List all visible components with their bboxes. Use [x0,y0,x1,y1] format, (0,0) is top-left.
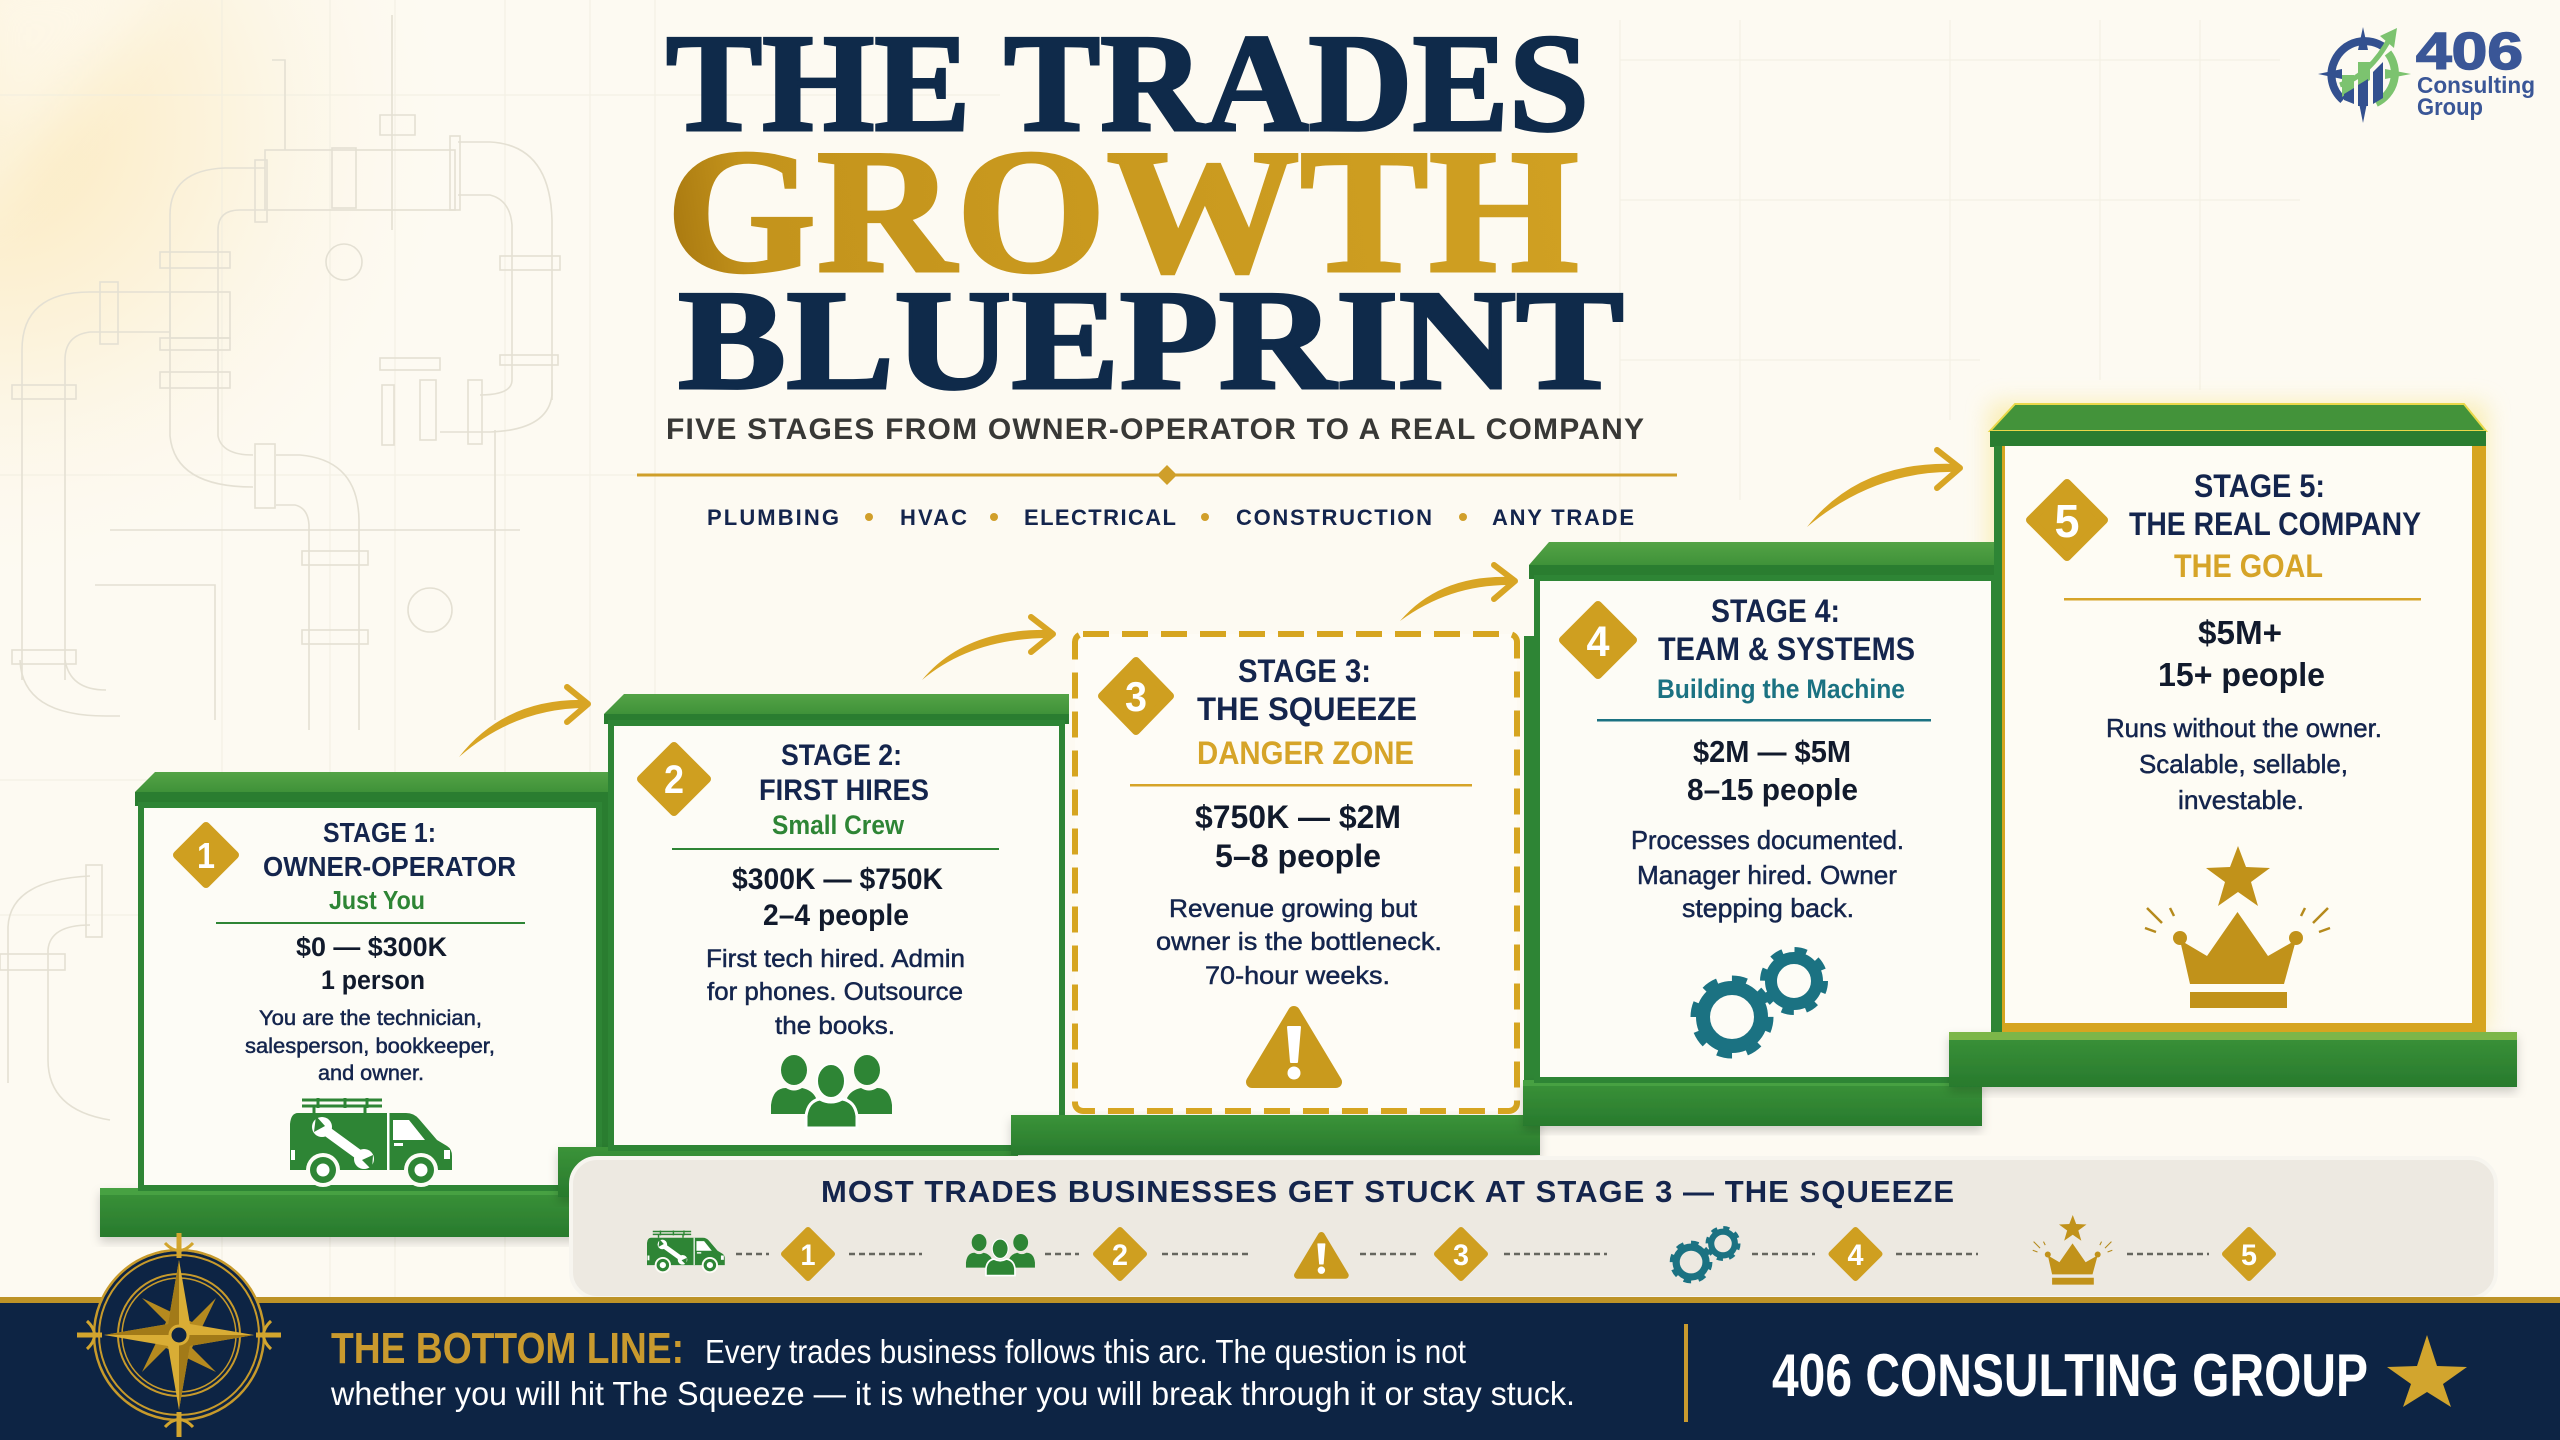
trades list: ELECTRICAL [1024,505,1176,530]
stage 2 card [611,723,1062,1148]
stage 5 revenue and people: 15+ people [2158,656,2325,693]
stage 4 heading [1657,593,1915,704]
logo: 406 Consulting Group: Consulting [2417,72,2535,98]
mini gears [1672,1228,1739,1281]
stage 2 heading: Small Crew [772,810,905,840]
stage 4 badge [1563,605,1633,675]
logo: 406 Consulting Group: Group [2417,94,2483,121]
stage 1 heading: Just You [329,885,425,915]
stage 5 badge [2030,483,2104,557]
stage 3 description: 70-hour weeks. [1205,962,1390,990]
stage 1 heading [263,817,516,915]
mini van [647,1231,725,1273]
trades list: HVAC [900,505,967,530]
stage 5 description: Runs without the owner. [2106,713,2382,743]
arrow: stage 4 to stage 5 [1807,450,1960,527]
stage 2 description: First tech hired. Admin [706,945,965,973]
stage 1 description: You are the technician, [259,1007,482,1030]
stage 2 roof [604,694,1069,724]
stage 5 revenue and people [2158,614,2325,693]
mini warning [1297,1235,1345,1275]
trades list: CONSTRUCTION [1236,505,1432,530]
stage 5 base [1949,1032,2517,1087]
stage 5 roof [1990,404,2486,447]
mini badge 4: 4 [1848,1239,1864,1272]
stage 1 revenue and people [296,932,447,995]
stage 4 description: Processes documented. [1631,825,1904,855]
bottom bar [0,1233,2560,1440]
stage 3 heading [1197,653,1417,771]
stage 2 revenue and people [732,863,943,932]
stage 4 card [1537,578,1994,1080]
stage 1 description: and owner. [318,1062,424,1085]
stage 2 heading: FIRST HIRES [759,774,929,807]
stage 1 base [100,1188,580,1237]
stage 3 revenue and people [1195,799,1401,874]
stage 5 heading: THE REAL COMPANY [2129,506,2421,542]
stage 4 revenue and people: $2M — $5M [1693,734,1851,769]
mini badge 4 [1832,1230,1880,1278]
stage 3 description: owner is the bottleneck. [1156,928,1442,956]
stage 4 description: Manager hired. Owner [1637,860,1897,890]
stage 5 description [2106,713,2382,815]
trades list [707,505,1634,530]
subtitle: FIVE STAGES FROM OWNER-OPERATOR TO A REAL COMPANY [666,413,1644,446]
logo: 406 Consulting Group: 406 [2416,23,2523,81]
title: The Trades Growth Blueprint: GROWTH [666,112,1579,310]
brand name: 406 CONSULTING GROUP [1772,1342,2368,1409]
bottom line statement [330,1324,1575,1412]
stage 1 revenue and people: $0 — $300K [296,932,447,962]
stage 5 badge: 5 [2054,495,2080,547]
stage 5 revenue and people: $5M+ [2198,614,2282,651]
arrow: stage 2 to stage 3 [922,617,1053,680]
icon: crew of three people [771,1055,892,1128]
stage 4 badge: 4 [1586,618,1610,666]
arrow: stage 3 to stage 4 [1400,565,1515,621]
stage 3 badge: 3 [1125,673,1147,720]
stage 1 heading: STAGE 1: [323,817,436,848]
panel: stage 1 owner-operator [100,772,610,1237]
mini badge 1: 1 [800,1239,816,1272]
stage 3 revenue and people: $750K — $2M [1195,799,1401,835]
stage 1 badge [177,826,235,884]
title: The Trades Growth Blueprint: BLUEPRINT [678,261,1624,419]
logo: 406 Consulting Group [2318,23,2535,123]
mini people [966,1234,1035,1276]
stage 2 description: for phones. Outsource [707,978,963,1006]
stage 4 heading: STAGE 4: [1711,593,1840,629]
stage 5 description: investable. [2178,785,2304,815]
stage 2 base [558,1147,1018,1197]
stage 1 heading: OWNER-OPERATOR [263,851,516,882]
compass emblem [77,1233,281,1437]
stage 1 badge: 1 [197,835,215,876]
mini badge 3 [1437,1230,1485,1278]
trades list: ANY TRADE [1492,505,1634,530]
icon: gold star [2387,1335,2467,1407]
title: The Trades Growth Blueprint [666,6,1624,419]
mini crown [2033,1215,2112,1285]
stage 3 description [1156,895,1442,990]
mini badge 5 [2225,1230,2273,1278]
bottom line statement: Every trades business follows this arc. The question is not [705,1333,1466,1370]
bottom line statement: THE BOTTOM LINE: [331,1324,684,1373]
stage 2 heading [759,739,929,840]
mini badge 5: 5 [2241,1239,2257,1272]
stage 2 heading: STAGE 2: [781,739,902,772]
stage 5 heading [2129,468,2421,584]
mini badge 2: 2 [1112,1239,1128,1272]
stage 4 description: stepping back. [1682,893,1854,923]
divider with diamond [637,465,1677,485]
icon: warning triangle [1252,1012,1336,1082]
stage 3 revenue and people: 5–8 people [1215,838,1381,874]
title: The Trades Growth Blueprint: THE TRADES [666,6,1589,161]
stage 4 revenue and people [1687,734,1858,807]
panel: stage 4 team and systems [1523,542,1998,1126]
stage 1 revenue and people: 1 person [321,965,425,995]
stage 4 base [1523,1080,1982,1126]
stage 2 revenue and people: $300K — $750K [732,863,943,896]
stage 3 heading: DANGER ZONE [1197,735,1414,771]
summary heading: MOST TRADES BUSINESSES GET STUCK AT STAGE 3 — THE SQUEEZE [821,1174,1954,1209]
panel: stage 3 the squeeze [1011,634,1540,1155]
stage 4 roof [1529,542,1998,579]
mini badge 1 [784,1230,832,1278]
stage 2 description [706,945,965,1040]
stage 1 description [245,1007,495,1085]
arrow: stage 1 to stage 2 [459,687,588,757]
stage 1 card [141,805,610,1190]
icon: gears [1695,950,1824,1054]
stage 2 revenue and people: 2–4 people [763,899,909,932]
icon: star and crown [2145,846,2330,1008]
stage 5 heading: THE GOAL [2174,548,2323,584]
stage 2 badge [641,746,707,812]
stage 4 heading: TEAM & SYSTEMS [1658,631,1915,667]
panel: stage 2 first hires [558,694,1069,1197]
panel: stage 5 the real company [1949,404,2517,1087]
stage 3 heading: THE SQUEEZE [1197,691,1417,727]
stage 3 dashed card [1075,634,1517,1111]
stage 3 description: Revenue growing but [1169,895,1417,923]
panel: summary strip [571,1158,2496,1298]
bottom line statement: whether you will hit The Squeeze — it is whether you will break through it or stay stuck. [330,1375,1575,1412]
stage 3 base [1011,1115,1540,1155]
stage 4 description [1631,825,1904,923]
stage 1 description: salesperson, bookkeeper, [245,1035,495,1058]
stage 1 roof [135,772,608,806]
stage 3 badge [1102,661,1170,731]
stage 4 revenue and people: 8–15 people [1687,772,1858,807]
icon: service van [290,1098,452,1187]
stage 2 badge: 2 [664,758,684,802]
stage 3 heading: STAGE 3: [1238,653,1371,689]
stage 5 card [1994,446,2486,1032]
stage 2 description: the books. [775,1012,895,1040]
trades list: PLUMBING [707,505,839,530]
stage 5 heading: STAGE 5: [2194,468,2325,504]
mini badge 2 [1096,1230,1144,1278]
stage 4 heading: Building the Machine [1657,674,1905,704]
summary icon row [647,1215,2273,1285]
mini badge 3: 3 [1453,1239,1469,1272]
stage 5 description: Scalable, sellable, [2139,749,2348,779]
